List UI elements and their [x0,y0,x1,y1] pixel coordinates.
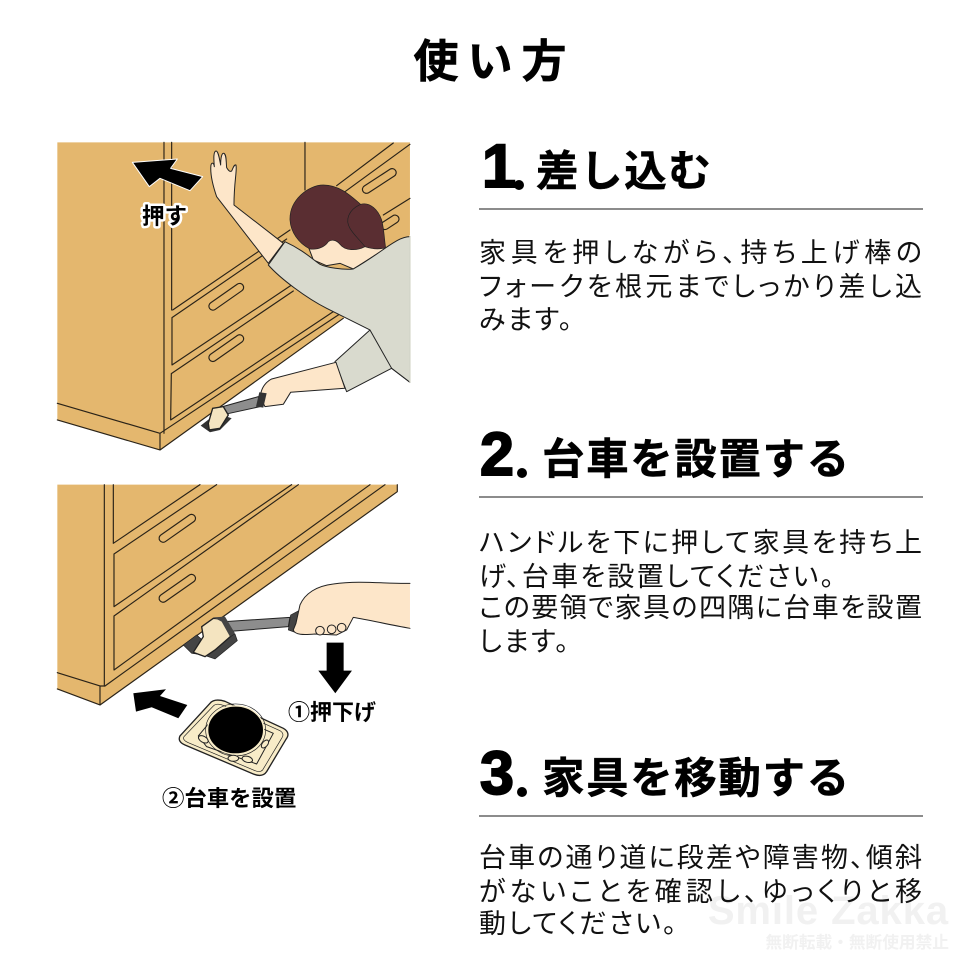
label: place dolly: ②台車を設置 [162,781,296,813]
step 2 text: します。 [479,620,571,659]
arrow: place dolly [133,689,187,718]
raised arm and hand [211,151,283,263]
step 1 text [479,234,922,337]
step 1 heading [482,132,712,200]
label: push: 押す [142,199,187,231]
lifter tool [201,392,267,432]
illustration: pushing the furniture and inserting the lifter [56,142,411,450]
shirt [268,237,410,382]
lower body shirt [335,322,410,392]
cabinet [57,485,397,705]
step 3 heading: 3 [480,739,514,807]
lower arm [261,362,345,407]
step 3 heading: 家具を移動する [542,745,851,806]
arrow: press down [318,643,352,693]
lifter tool [183,610,305,659]
dolly plate [179,700,288,775]
title: 使い方 [413,25,576,90]
step 1 heading: 1 [482,132,516,200]
step 2 text: げ、台車を設置してください。 [479,555,836,594]
step 2 text [479,524,922,659]
person [211,151,410,407]
face [308,232,386,269]
illustration: lifting and placing the dolly [56,484,410,813]
step 2 heading: 2 [480,420,514,488]
hand and arm [293,582,410,635]
watermark [708,889,949,953]
arrow: push direction [132,159,203,191]
hair [290,185,386,250]
cabinet [57,142,410,450]
label: press down: ①押下げ [288,695,376,727]
step 2 heading: 台車を設置する [542,426,851,487]
watermark: 無断転載・無断使用禁止 [765,929,949,953]
step 1 heading: 差し込む [536,138,712,199]
step 1 text: みます。 [479,298,574,337]
step 3 text: 動してください。 [479,902,679,941]
watermark: Smile Zakka [708,889,949,933]
